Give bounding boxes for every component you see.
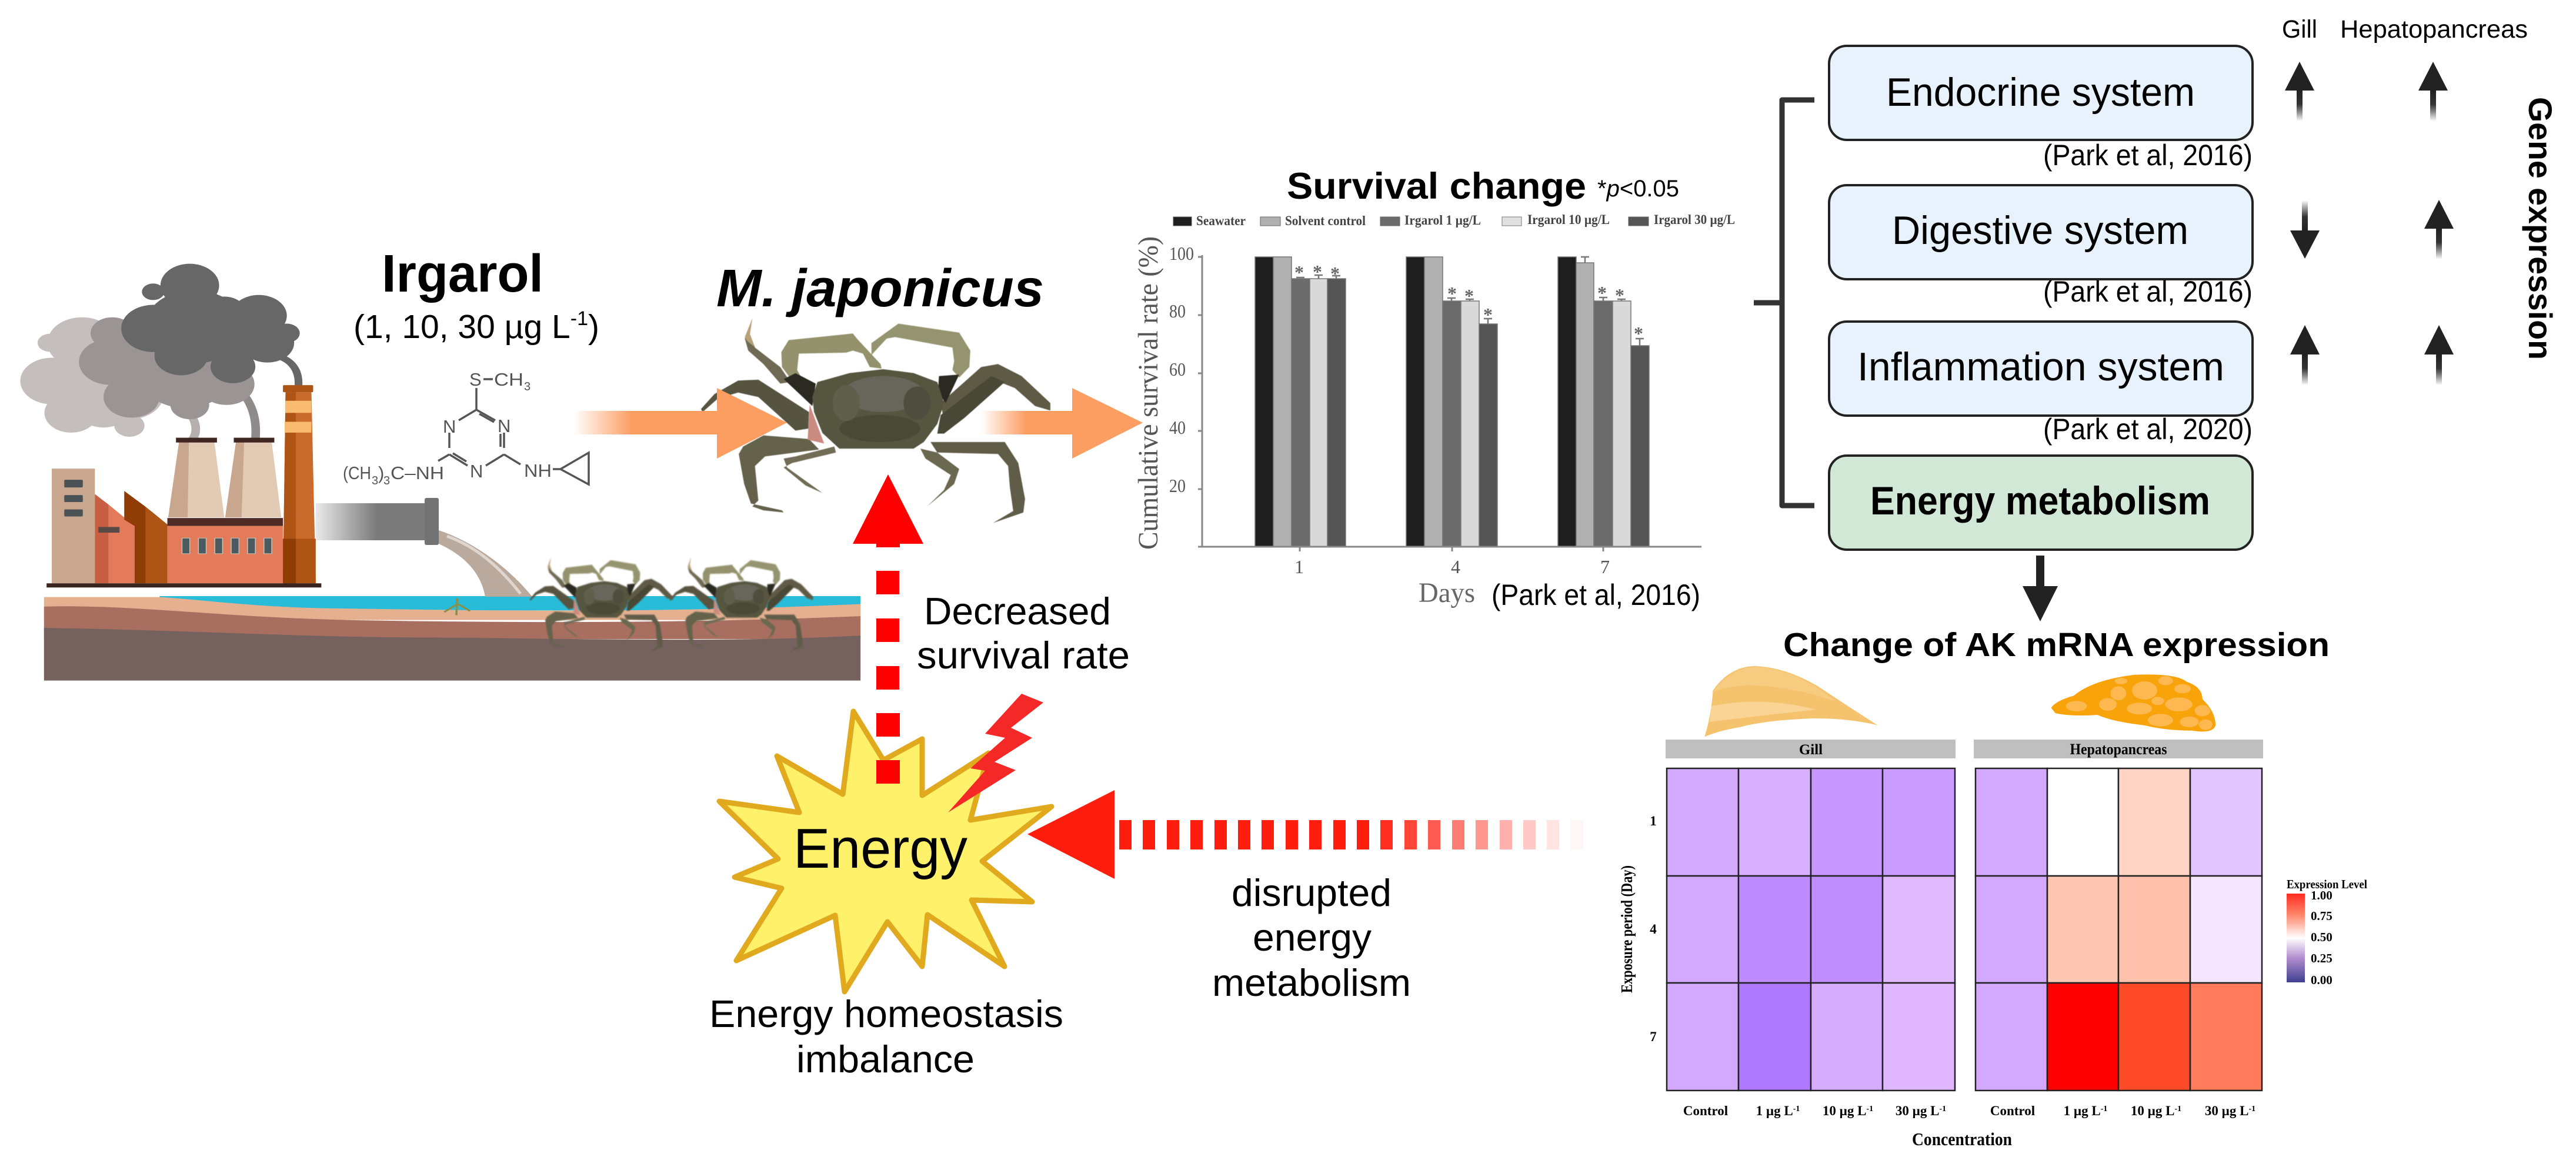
box: digestive system: Digestive system [1892,208,2188,253]
x axis labels: hepatopancreas: -1 [2101,1105,2107,1113]
y axis: exposure period: 7 [1650,1029,1657,1044]
arrow: crab to survival chart [981,388,1143,459]
x axis labels: gill: -1 [1939,1105,1946,1113]
x axis labels: hepatopancreas [1990,1103,2255,1118]
heading: change of AK mRNA expression: Change of AK mRNA expression [1783,626,2330,664]
arrow: red dashed heatmap to energy [1027,790,1583,879]
chart legend: Seawater [1196,213,1246,228]
note: significance: *p<0.05 [1597,176,1679,202]
x axis labels: hepatopancreas: Control [1990,1103,2035,1118]
significance asterisks: * [1597,282,1607,303]
text: disrupted energy metabolism: metabolism [1212,961,1411,1004]
legend: expression level: 0.25 [2311,951,2333,965]
heatmap: hepatopancreas [1976,768,2262,1091]
arrow: endocrine gill up [2285,62,2314,121]
citation: (Park et al, 2016) [1491,578,1700,611]
text: Energy: Energy [793,817,967,880]
x axis labels: gill: 1 µg L [1756,1103,1793,1118]
legend: expression level: 0.00 [2311,973,2333,987]
x axis labels: gill: Control [1683,1103,1728,1118]
y axis: exposure period [1618,814,1657,1044]
y axis ticks and labels: 60 [1169,359,1186,380]
y axis: exposure period: Exposure period (Day) [1618,865,1636,993]
significance asterisks: * [1464,285,1474,306]
x axis title: concentration: Concentration [1912,1129,2012,1149]
x axis and labels: 4 [1451,556,1460,577]
arrow: energy metabolism to AK expression [2023,556,2058,621]
text: decreased survival rate [917,590,1130,677]
box: inflammation system: Inflammation system [1857,344,2224,389]
y axis title: Cumulative survival rate (%) [1133,236,1164,550]
heading: Irgarol: Irgarol [382,245,543,303]
bars: day 1 [1255,257,1346,547]
box: endocrine system: Endocrine system [1886,70,2195,115]
x axis labels: gill: 30 µg L [1896,1103,1939,1118]
x axis and labels: 1 [1294,556,1304,577]
icon: energy starburst [719,711,1052,992]
citation: inflammation: (Park et al, 2020) [2043,413,2253,446]
x axis labels: hepatopancreas: 10 µg L [2131,1103,2174,1118]
chemical structure of Irgarol: N [443,416,456,437]
x axis labels: gill: 10 µg L [1823,1103,1866,1118]
heading: M. japonicus: M. japonicus [716,259,1044,318]
x axis and labels [1198,547,1701,577]
legend: expression level [2287,877,2367,987]
chemical structure of Irgarol: ) [378,463,384,483]
x axis labels: hepatopancreas: -1 [2174,1105,2181,1113]
heatmap: gill [1667,768,1955,1091]
legend: expression level: 0.50 [2311,930,2333,944]
x axis labels: gill: -1 [1866,1105,1873,1113]
chemical structure of Irgarol: NH [524,460,552,481]
significance asterisks: * [1447,283,1457,304]
panel: AK mRNA heatmap [1618,626,2367,1149]
arrow: endocrine hepatopancreas up [2418,62,2448,121]
significance asterisks: * [1330,263,1340,284]
box: digestive system [1829,185,2253,279]
panel: survival change chart [1133,166,1735,611]
panel: industrial pollution scene [20,264,860,681]
icon: large mitten crab [701,319,1050,523]
text: Irgarol concentrations: (1, 10, 30 µg L [353,308,570,346]
bars: day 4 [1406,257,1497,547]
text: decreased survival rate: Decreased [924,590,1111,633]
x axis and labels: 7 [1600,556,1610,577]
icon: lightning bolt [948,694,1043,812]
chemical structure of Irgarol: CH [494,369,523,390]
heading: Survival change: Survival change [1287,166,1586,207]
strip: gill [1666,740,1956,758]
icon: two small crabs on the shore [530,558,813,652]
text: energy homeostasis imbalance: imbalance [796,1038,975,1081]
box: energy metabolism [1829,456,2253,550]
chemical structure of Irgarol: N [498,416,510,436]
x axis labels: hepatopancreas: 1 µg L [2064,1103,2101,1118]
y axis: exposure period: 4 [1650,922,1657,936]
strip: hepatopancreas [1974,740,2263,758]
legend: expression level: Expression Level [2287,877,2367,891]
legend: expression level: 1.00 [2311,888,2333,902]
significance asterisks: * [1294,262,1304,283]
x axis labels: hepatopancreas: 30 µg L [2205,1103,2248,1118]
column labels: gill and hepatopancreas: Hepatopancreas [2340,15,2528,44]
factory [46,385,321,587]
y axis ticks and labels: 80 [1169,300,1186,322]
significance asterisks: * [1634,323,1643,344]
icon: gill [1704,666,1878,737]
column labels: gill and hepatopancreas: Gill [2282,15,2317,44]
arrow: inflammation gill up [2290,325,2320,385]
citation: digestive: (Park et al, 2016) [2043,275,2253,308]
icon: hepatopancreas [2051,674,2215,731]
ground and water layers [44,596,860,681]
text: disrupted energy metabolism: energy [1253,916,1372,959]
text: energy homeostasis imbalance [709,992,1063,1081]
chemical structure of Irgarol: N [470,461,483,481]
box: endocrine system [1829,46,2253,140]
label: gene expression: Gene expression [2522,97,2559,360]
chemical structure of Irgarol: S [469,369,482,390]
chart legend [1173,212,1735,228]
y axis: exposure period: 1 [1650,814,1657,828]
x axis labels: hepatopancreas: -1 [2248,1105,2255,1113]
chart legend: Irgarol 10 µg/L [1527,212,1610,227]
y axis ticks and labels: 20 [1169,475,1186,496]
arrow: Irgarol to crab [573,388,787,459]
significance asterisks: * [1313,261,1322,282]
error bars [1296,257,1644,346]
strip: gill: Gill [1799,742,1823,758]
text: disrupted energy metabolism: disrupted [1232,871,1392,914]
arrow: digestive gill down [2290,200,2320,259]
discharge pipe and effluent [316,498,532,597]
chart legend: Irgarol 1 µg/L [1404,213,1481,228]
box: inflammation system [1829,322,2253,416]
bars: day 7 [1558,257,1649,547]
y axis ticks and labels: 40 [1169,417,1186,438]
chemical structure of Irgarol: C–NH [391,463,444,483]
bracket connector [1754,100,1814,506]
arrow: digestive hepatopancreas up [2424,200,2454,259]
chemical structure of Irgarol: 3 [383,474,390,487]
significance asterisks: * [1615,285,1624,306]
text: decreased survival rate: survival rate [917,634,1130,677]
smoke clouds [20,264,300,440]
arrow segments overlapping starburst [876,713,900,784]
text: Irgarol concentrations: -1 [570,307,588,330]
chemical structure of Irgarol: (CH [343,463,371,483]
significance asterisks: * [1483,304,1493,325]
arrow: inflammation hepatopancreas up [2424,325,2454,385]
y axis ticks and labels: 100 [1169,243,1194,264]
x axis title: Days [1419,577,1475,608]
x axis labels: gill [1683,1103,1946,1118]
strip: hepatopancreas: Hepatopancreas [2070,741,2167,758]
y axis ticks and labels [1169,243,1202,547]
text: disrupted energy metabolism [1212,871,1411,1004]
significance asterisks [1294,261,1643,344]
chemical structure of Irgarol: 3 [372,474,378,487]
legend: expression level: 0.75 [2311,909,2333,923]
chemical structure of Irgarol: 3 [524,380,530,393]
text: Irgarol concentrations: ) [588,308,599,346]
chart legend: Solvent control [1285,213,1366,228]
arrow: red dashed energy to crab [853,474,923,690]
x axis labels: gill: -1 [1793,1105,1800,1113]
citation: endocrine: (Park et al, 2016) [2043,139,2253,172]
text: energy homeostasis imbalance: Energy homeostasis [709,992,1063,1035]
chemical structure of Irgarol [343,369,589,487]
chart legend: Irgarol 30 µg/L [1654,212,1735,227]
box: energy metabolism: Energy metabolism [1870,479,2210,523]
